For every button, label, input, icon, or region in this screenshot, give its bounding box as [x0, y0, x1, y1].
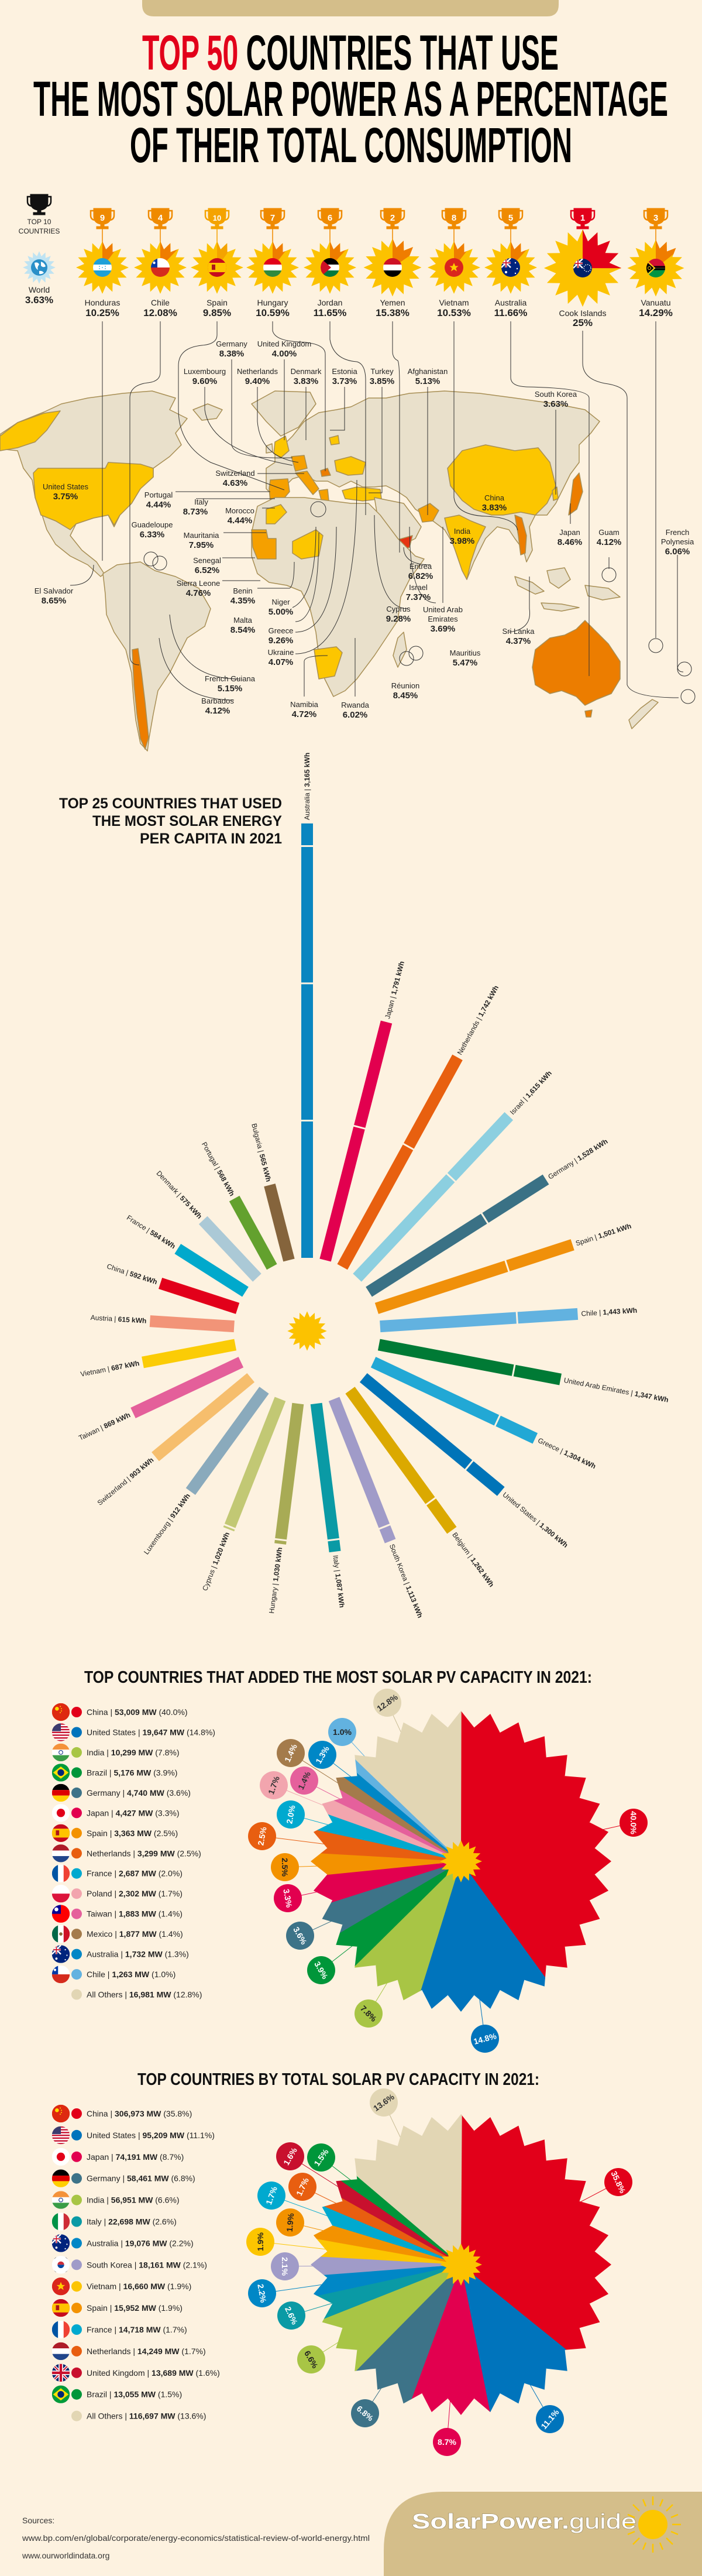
map labels: French Guiana	[205, 674, 256, 683]
country: Spain: 9.85%	[203, 307, 231, 318]
map labels: China	[484, 493, 505, 502]
radial bar chart: solar energy per capita: Japan | 1,791 kWh	[383, 961, 406, 1020]
logo text: SolarPower. guide	[412, 2509, 636, 2533]
pie labels: 3.6%	[291, 1925, 309, 1946]
country: Australia	[484, 208, 537, 316]
pie labels	[246, 2088, 632, 2456]
pie labels: 1.4%	[283, 1743, 299, 1764]
map labels: 6.06%	[665, 547, 690, 557]
map labels: Israel	[409, 583, 428, 592]
pie labels: 1.3%	[314, 1744, 331, 1765]
country: Vietnam: 8	[452, 213, 456, 223]
icon: center sun	[285, 1309, 329, 1353]
radial bar chart: solar energy per capita	[77, 753, 670, 1620]
country: Cook Islands: Cook Islands	[559, 308, 606, 318]
map labels: Guadeloupe	[132, 520, 173, 529]
pie labels: 13.6%	[371, 2092, 396, 2113]
country: Vietnam: Vietnam	[439, 298, 469, 307]
legend: added capacity: France | 2,687 MW (2.0%)	[87, 1869, 183, 1878]
map labels: Niger	[271, 598, 290, 606]
country: Chile: 12.08%	[143, 307, 177, 318]
radial bar chart: solar energy per capita: Australia | 3,165 kWh	[303, 753, 311, 820]
radial bar chart: solar energy per capita: Germany | 1,528 kWh	[546, 1137, 609, 1181]
map labels: 8.54%	[230, 625, 255, 635]
map labels: 6.82%	[408, 571, 433, 581]
map labels: Cyprus	[386, 605, 411, 613]
radial bar chart: solar energy per capita: Taiwan | 869 kWh	[77, 1411, 132, 1442]
pie labels: 1.6%	[281, 2146, 299, 2167]
legend: total capacity: Brazil | 13,055 MW (1.5%)	[87, 2390, 182, 2399]
pie chart: added capacity	[248, 1689, 648, 2053]
map labels: 4.76%	[186, 588, 211, 598]
map labels: Guam	[598, 528, 620, 537]
legend: added capacity: Spain | 3,363 MW (2.5%)	[87, 1829, 178, 1838]
legend: total capacity: France | 14,718 MW (1.7%)	[87, 2325, 187, 2334]
map labels: 3.69%	[431, 624, 455, 634]
pie labels: 1.0%	[333, 1727, 352, 1737]
legend: total capacity: Australia | 19,076 MW (2.2%)	[87, 2238, 194, 2248]
legend: added capacity: Japan | 4,427 MW (3.3%)	[87, 1808, 179, 1817]
pie labels: 2.2%	[256, 2283, 269, 2304]
legend: added capacity: Poland | 2,302 MW (1.7%)	[87, 1889, 183, 1898]
legend: added capacity: Brazil | 5,176 MW (3.9%)	[87, 1768, 177, 1777]
pie labels: 40.0%	[629, 1811, 638, 1834]
map labels: 8.38%	[219, 349, 244, 359]
map labels: Ukraine	[268, 648, 294, 657]
map: Africa	[252, 498, 424, 697]
pie labels: 1.9%	[285, 2213, 295, 2232]
country: Honduras: Honduras	[85, 298, 120, 307]
country: Chile: 4	[158, 213, 163, 223]
radial bar chart: solar energy per capita: Chile | 1,443 kWh	[581, 1306, 638, 1318]
country: Yemen: 15.38%	[376, 307, 410, 318]
legend: added capacity: Chile | 1,263 MW (1.0%)	[87, 1970, 176, 1979]
map labels: Italy	[194, 498, 208, 506]
map: Australia	[532, 620, 620, 705]
legend: total capacity: Germany | 58,461 MW (6.8%)	[87, 2174, 195, 2183]
legend: added capacity: Germany | 4,740 MW (3.6%)	[87, 1788, 191, 1798]
map labels: El Salvador	[35, 586, 74, 595]
map labels: 9.60%	[192, 376, 217, 386]
radial bar chart: solar energy per capita: Spain | 1,501 kWh	[574, 1222, 632, 1247]
legend: added capacity: China | 53,009 MW (40.0%)	[87, 1707, 188, 1717]
radial bar chart: solar energy per capita: France | 584 kWh	[125, 1213, 177, 1250]
map labels: Malta	[233, 616, 253, 625]
pie labels: 1.7%	[266, 1775, 281, 1796]
legend: total capacity: All Others | 116,697 MW (13.6%)	[87, 2412, 206, 2421]
legend: total capacity: India | 56,951 MW (6.6%)	[87, 2196, 179, 2205]
map labels: United States	[43, 482, 89, 491]
country: Cook Islands	[544, 208, 621, 326]
country: Vanuatu	[627, 208, 684, 316]
legend: total capacity: China | 306,973 MW (35.8%)	[87, 2109, 192, 2118]
map labels: Mauritius	[450, 649, 481, 657]
map labels: 8.45%	[393, 691, 418, 701]
map labels: 3.98%	[450, 536, 474, 546]
legend: added capacity: United States | 19,647 MW (14.8%)	[87, 1728, 215, 1737]
map labels: Afghanistan	[408, 367, 448, 376]
country: Hungary: 7	[270, 213, 275, 223]
map labels: United Arab	[423, 605, 463, 614]
radial bar chart: solar energy per capita: Switzerland | 903 kWh	[96, 1456, 155, 1507]
legend: total capacity: Spain | 15,952 MW (1.9%)	[87, 2303, 183, 2313]
map labels: Denmark	[291, 367, 322, 376]
map labels: Benin	[233, 586, 253, 595]
country: Vanuatu: Vanuatu	[641, 298, 671, 307]
world map	[0, 391, 658, 751]
map labels: 4.63%	[223, 478, 247, 488]
map: island markers	[144, 502, 695, 704]
legend: added capacity: Australia | 1,732 MW (1.3%)	[87, 1950, 189, 1959]
country: Honduras: 9	[100, 213, 105, 223]
country: Cook Islands: 25%	[573, 317, 593, 328]
map labels: 7.95%	[189, 540, 214, 550]
logo panel	[384, 2492, 702, 2576]
icon: globe	[23, 252, 55, 283]
pie labels: 8.7%	[438, 2437, 457, 2447]
radial bar chart: solar energy per capita: Israel | 1,615 kWh	[508, 1069, 553, 1116]
world	[23, 252, 55, 303]
radial bar chart: solar energy per capita: United States | 1,300 kWh	[501, 1490, 570, 1549]
country: Vietnam: 10.53%	[437, 307, 471, 318]
country: Vietnam	[428, 208, 480, 316]
legend: added capacity: Taiwan | 1,883 MW (1.4%)	[87, 1909, 183, 1919]
map labels: Eritrea	[410, 562, 432, 571]
pie labels: 11.1%	[539, 2407, 561, 2431]
top tan bar	[142, 0, 559, 16]
legend: total capacity: Vietnam | 16,660 MW (1.9%)	[87, 2282, 191, 2291]
map labels: India	[454, 527, 471, 536]
map: Japan	[569, 473, 583, 515]
map labels: 6.02%	[343, 710, 367, 720]
icon: logo sun	[625, 2496, 681, 2553]
map labels: 7.37%	[406, 592, 431, 602]
legend: total capacity: South Korea | 18,161 MW (2.1%)	[87, 2260, 207, 2269]
radial bar chart: solar energy per capita: Austria | 615 kWh	[90, 1313, 147, 1325]
map labels: 9.26%	[269, 636, 293, 646]
map labels: Luxembourg	[184, 367, 226, 376]
map labels: 9.40%	[245, 376, 270, 386]
radial bar chart: solar energy per capita: Bulgaria | 565 kWh	[250, 1123, 273, 1183]
map labels: 4.12%	[597, 537, 621, 547]
map labels: 5.15%	[218, 684, 242, 694]
map labels: Japan	[559, 528, 580, 537]
map labels: 8.46%	[558, 537, 582, 547]
legend: total capacity: Italy | 22,698 MW (2.6%)	[87, 2217, 177, 2227]
legend: added capacity: Mexico | 1,877 MW (1.4%)	[87, 1929, 183, 1939]
top 10 legend: TOP 10	[27, 218, 51, 226]
country: Honduras: 10.25%	[85, 307, 119, 318]
map labels: 5.00%	[269, 607, 293, 617]
map labels: 5.47%	[453, 658, 477, 668]
map labels: Rwanda	[341, 701, 370, 709]
legend: total capacity: United States | 95,209 MW (11.1%)	[87, 2131, 215, 2140]
map labels: 4.72%	[292, 709, 316, 719]
map labels: 6.33%	[140, 530, 164, 540]
pie chart: total capacity	[246, 2088, 632, 2456]
map labels: 8.73%	[183, 507, 208, 517]
map labels: Polynesia	[661, 537, 694, 546]
pie labels: 3.3%	[281, 1888, 294, 1909]
country: Australia: 11.66%	[494, 307, 527, 318]
map labels: Senegal	[193, 556, 221, 565]
map labels: Netherlands	[237, 367, 278, 376]
top 10 legend: COUNTRIES	[19, 227, 60, 235]
country: Jordan	[304, 208, 356, 316]
radial chart title: THE MOST SOLAR ENERGY	[92, 813, 282, 829]
pie labels: 2.5%	[256, 1826, 269, 1846]
radial chart title: PER CAPITA IN 2021	[140, 831, 282, 847]
pie labels: 7.8%	[359, 2004, 378, 2023]
pie labels: 3.9%	[312, 1960, 330, 1981]
country: Hungary: Hungary	[257, 298, 288, 307]
pie labels: 6.6%	[302, 2349, 320, 2370]
map labels: 3.63%	[543, 399, 568, 409]
radial chart title	[59, 795, 282, 847]
sources: www.ourworldindata.org	[22, 2551, 109, 2560]
map labels: Sri Lanka	[503, 627, 535, 636]
country: Yemen	[364, 208, 421, 316]
radial bar chart: solar energy per capita: Luxembourg | 912 kWh	[142, 1492, 192, 1556]
pie labels: 14.8%	[473, 2031, 498, 2046]
map labels: United Kingdom	[257, 339, 311, 348]
pie labels: 1.7%	[294, 2176, 311, 2197]
country: Hungary	[246, 208, 299, 316]
map labels: 3.83%	[294, 376, 318, 386]
map: North America	[0, 391, 187, 577]
pie labels	[248, 1689, 648, 2053]
map labels: Estonia	[332, 367, 357, 376]
map labels: Portugal	[144, 490, 173, 499]
map labels: 8.65%	[42, 596, 66, 606]
radial bar chart: solar energy per capita: Denmark | 575 kWh	[155, 1169, 204, 1220]
map labels: Turkey	[370, 367, 394, 376]
country: Yemen: 2	[390, 213, 395, 223]
icon: black trophy	[27, 194, 51, 215]
map labels: 4.37%	[506, 636, 531, 646]
map labels: Mauritania	[184, 531, 219, 540]
legend: added capacity: Netherlands | 3,299 MW (2.5%)	[87, 1848, 201, 1858]
radial bar chart: solar energy per capita: Cyprus | 1,020 kWh	[201, 1531, 231, 1592]
radial bar chart: solar energy per capita: South Korea | 1,113 kWh	[388, 1543, 424, 1619]
map labels: 3.83%	[482, 503, 507, 513]
legend: total capacity: Japan | 74,191 MW (8.7%)	[87, 2152, 184, 2162]
map: islands of SE Asia	[515, 577, 544, 594]
radial bar chart: solar energy per capita: Netherlands | 1,742 kWh	[456, 984, 500, 1057]
map labels: Greece	[269, 626, 293, 635]
map leader lines	[70, 321, 683, 700]
country: Cook Islands: 1	[580, 213, 585, 223]
country: Spain: 10	[213, 214, 221, 222]
section title: total capacity: TOP COUNTRIES BY TOTAL SOLAR PV CAPACITY IN 2021:	[137, 2070, 539, 2089]
radial chart title: TOP 25 COUNTRIES THAT USED	[59, 795, 282, 812]
pie labels: 2.0%	[284, 1804, 297, 1824]
country: Yemen: Yemen	[380, 298, 405, 307]
pie labels: 6.8%	[355, 2404, 376, 2423]
world: 3.63%	[25, 294, 53, 306]
country: Australia: Australia	[495, 298, 526, 307]
country: Spain: Spain	[207, 298, 228, 307]
map labels: 9.28%	[386, 614, 411, 624]
map labels: 4.44%	[228, 516, 252, 526]
map labels: Namibia	[290, 700, 319, 709]
radial bar chart: solar energy per capita: Hungary | 1,030 kWh	[267, 1547, 284, 1614]
radial bar chart: solar energy per capita: Belgium | 1,262 kWh	[450, 1531, 495, 1589]
map labels: 5.13%	[415, 376, 440, 386]
pie labels: 1.4%	[296, 1770, 312, 1791]
country: Chile: Chile	[151, 298, 170, 307]
map labels: 4.12%	[205, 706, 230, 716]
country: Spain	[191, 208, 243, 316]
pie labels: 1.7%	[264, 2185, 279, 2206]
map labels: Germany	[216, 339, 247, 348]
sources	[22, 2516, 370, 2560]
country: Honduras	[76, 208, 129, 316]
map: Eurasia	[266, 391, 600, 579]
country: Chile	[134, 208, 187, 316]
pie labels: 12.8%	[375, 1692, 400, 1713]
radial bar chart: solar energy per capita: United Arab Emirates | 1,347 kWh	[563, 1376, 669, 1404]
world: World	[29, 285, 50, 294]
sources: www.bp.com/en/global/corporate/energy-economics/statistical-review-of-world-energy.html	[22, 2533, 370, 2543]
map labels: South Korea	[535, 390, 577, 399]
pie labels: 2.1%	[280, 2257, 290, 2276]
map labels: Emirates	[428, 615, 458, 623]
map labels: French	[666, 528, 689, 537]
map labels: Barbados	[201, 697, 234, 705]
pie labels: 1.5%	[312, 2147, 331, 2168]
legend: total capacity: Netherlands | 14,249 MW (1.7%)	[87, 2347, 206, 2356]
pie labels: 2.6%	[283, 2305, 300, 2326]
pie labels: 2.5%	[280, 1858, 290, 1877]
map labels: 3.73%	[332, 376, 357, 386]
legend: added capacity	[52, 1703, 215, 1999]
map labels: 4.00%	[272, 349, 297, 359]
legend: added capacity: India | 10,299 MW (7.8%)	[87, 1748, 179, 1757]
legend: added capacity: All Others | 16,981 MW (12.8%)	[87, 1990, 202, 1999]
map labels: 6.52%	[195, 565, 219, 575]
country: Australia: 5	[508, 213, 513, 223]
map labels: Morocco	[225, 506, 254, 515]
radial bar chart: solar energy per capita: Italy | 1,087 kWh	[331, 1555, 346, 1608]
country: Jordan: 6	[328, 213, 332, 223]
pie labels: 1.9%	[256, 2232, 265, 2251]
legend: total capacity: United Kingdom | 13,689 MW (1.6%)	[87, 2368, 220, 2378]
map labels: 3.75%	[53, 492, 78, 502]
map labels	[35, 339, 694, 720]
map labels: Sierra Leone	[177, 579, 220, 588]
top 10 legend	[19, 194, 60, 235]
section title: added capacity: TOP COUNTRIES THAT ADDED THE MOST SOLAR PV CAPACITY IN 2021:	[84, 1668, 592, 1687]
radial bar chart: solar energy per capita: Portugal | 568 kWh	[200, 1141, 236, 1198]
radial bar chart: solar energy per capita: China | 592 kWh	[106, 1262, 159, 1286]
country: Vanuatu: 3	[653, 213, 658, 223]
top 10 countries row	[73, 208, 687, 328]
map: South America	[103, 562, 211, 751]
map labels: 4.35%	[230, 596, 255, 606]
radial bar chart: solar energy per capita: Greece | 1,304 kWh	[536, 1436, 597, 1470]
map labels: Réunion	[391, 681, 419, 690]
map labels: Switzerland	[215, 469, 255, 478]
legend: total capacity	[52, 2105, 220, 2421]
map labels: 4.07%	[269, 657, 293, 667]
country: Hungary: 10.59%	[256, 307, 290, 318]
pie labels: 35.8%	[609, 2170, 628, 2195]
country: Jordan: Jordan	[318, 298, 342, 307]
map labels: 3.85%	[370, 376, 394, 386]
map labels: 4.44%	[146, 500, 171, 510]
radial bar chart: solar energy per capita: Vietnam | 687 kWh	[80, 1359, 140, 1378]
country: Vanuatu: 14.29%	[639, 307, 673, 318]
sources: Sources:	[22, 2516, 54, 2525]
title	[33, 25, 668, 173]
country: Jordan: 11.65%	[314, 307, 346, 318]
